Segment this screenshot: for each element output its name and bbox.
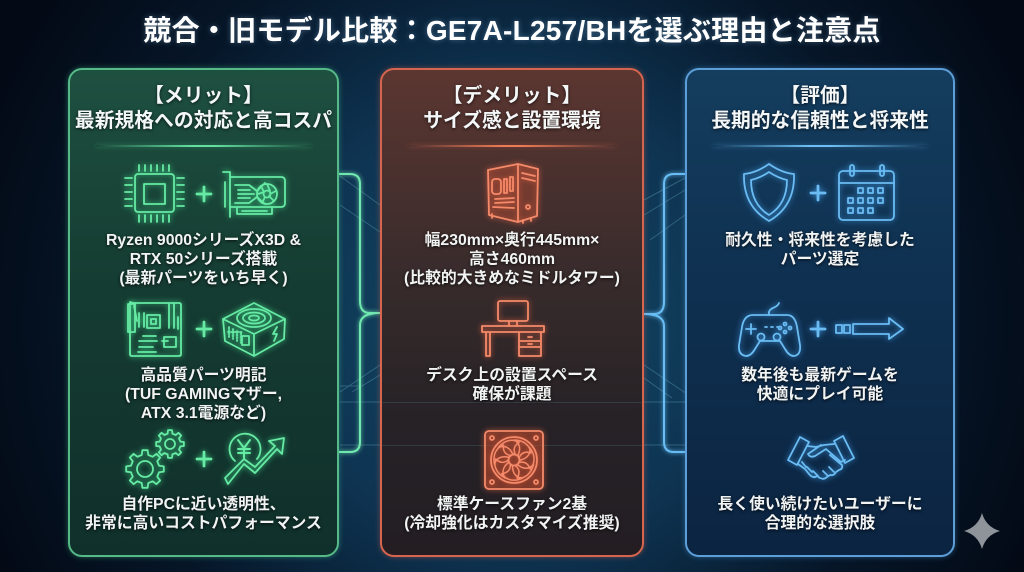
icon: CPU plus graphics card: [122, 162, 290, 225]
text: dimensions: 高さ460mm: [469, 251, 555, 268]
title: 競合・旧モデル比較：GE7A-L257/BHを選ぶ理由と注意点: [143, 15, 881, 46]
heading: demerits: サイズ感と設置環境: [423, 110, 601, 132]
text: high quality parts: ATX 3.1電源など): [141, 405, 266, 422]
heading: demerits: [423, 84, 602, 132]
icon: case fan: [480, 426, 548, 494]
text: latest parts: [106, 231, 301, 288]
text: rational choice: 長く使い続けたいユーザーに: [717, 496, 923, 512]
icon: gears plus yen growth: [122, 426, 288, 492]
icon: gamepad plus arrow: [734, 300, 906, 360]
text: desk space: デスク上の設置スペース: [426, 366, 598, 384]
panel: merits: [68, 68, 339, 557]
text: desk space: 確保が課題: [472, 386, 552, 403]
heading: demerits: 【デメリット】: [443, 85, 581, 107]
heading: merits: 【メリット】: [144, 85, 263, 107]
heading: merits: 最新規格への対応と高コスパ: [75, 110, 332, 132]
panel: evaluation: [685, 68, 955, 557]
text: rational choice: [717, 495, 923, 532]
heading: evaluation: 【評価】: [780, 85, 860, 107]
text: high quality parts: 高品質パーツ明記: [140, 366, 267, 384]
icon: motherboard plus power supply: [123, 298, 290, 361]
text: dimensions: [404, 231, 620, 288]
text: high quality parts: (TUF GAMINGマザー,: [125, 386, 282, 403]
text: rational choice: 合理的な選択肢: [765, 515, 875, 532]
heading: merits: [75, 84, 332, 132]
text: desk space: [426, 366, 598, 403]
text: latest parts: Ryzen 9000シリーズX3D &: [106, 232, 301, 248]
text: cost performance: [85, 495, 322, 532]
text: durability: パーツ選定: [781, 251, 859, 268]
text: future games: [740, 366, 899, 403]
heading: evaluation: [711, 84, 929, 132]
icon: shield plus calendar: [740, 160, 899, 225]
text: latest parts: (最新パーツをいち早く): [119, 270, 288, 287]
text: durability: 耐久性・将来性を考慮した: [725, 232, 915, 248]
icon: PC tower: [483, 160, 543, 227]
icon: handshake: [784, 432, 858, 484]
text: future games: 数年後も最新ゲームを: [741, 366, 899, 384]
text: future games: 快適にプレイ可能: [757, 386, 883, 403]
panel: demerits: [380, 68, 644, 557]
heading: evaluation: 長期的な信頼性と将来性: [711, 110, 929, 132]
text: dimensions: 幅230mm×奥行445mm×: [425, 232, 599, 248]
icon: sparkle watermark: [964, 513, 1000, 549]
icon: desk with monitor: [477, 296, 549, 361]
text: case fans: (冷却強化はカスタマイズ推奨): [404, 515, 620, 532]
text: case fans: [404, 495, 620, 532]
text: durability: [724, 231, 915, 268]
text: latest parts: RTX 50シリーズ搭載: [130, 251, 277, 268]
text: case fans: 標準ケースファン2基: [437, 496, 587, 512]
text: cost performance: 非常に高いコストパフォーマンス: [85, 515, 322, 532]
text: cost performance: 自作PCに近い透明性、: [121, 496, 286, 512]
text: high quality parts: [124, 366, 282, 423]
text: dimensions: (比較的大きめなミドルタワー): [404, 270, 620, 287]
